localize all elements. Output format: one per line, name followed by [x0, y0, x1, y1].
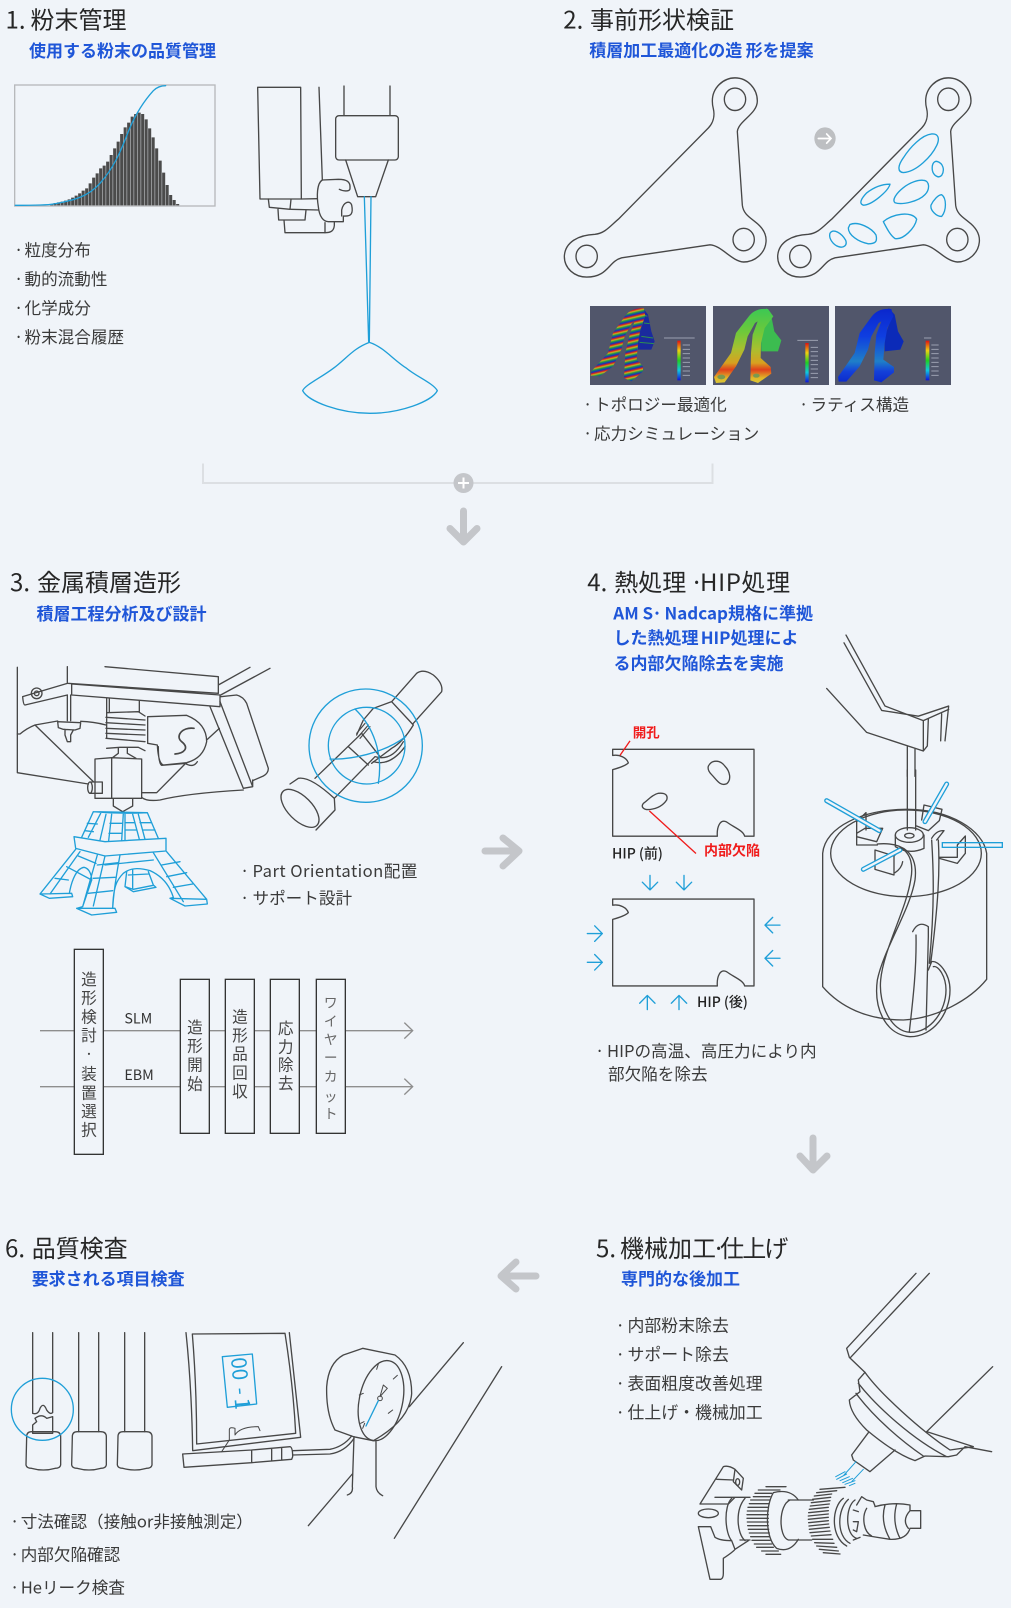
subheading: step 4: Nadcap規格に準拠	[664, 600, 813, 624]
bullet list: powder checks: ·	[14, 237, 23, 261]
bullet list: post processing: ·	[616, 1312, 625, 1336]
chart: particle size histogram with cumulative curve	[15, 85, 215, 206]
flow chart: build process: 選	[81, 1099, 97, 1122]
flow chart: build process: ヤ	[324, 1029, 337, 1049]
image: simulation heat maps	[590, 306, 951, 385]
flow chart: build process: 収	[232, 1079, 248, 1102]
icon: furnace with part and fixtures	[823, 770, 1002, 1037]
subheading: step 4: HIP処理によ	[701, 624, 799, 649]
bullet list: inspections: 寸法確認（接触or非接触測定）	[21, 1508, 253, 1532]
flow chart: build process: 品	[232, 1042, 248, 1065]
flow chart: build process: 造	[187, 1015, 203, 1038]
subheading: step 4: AM S	[613, 600, 653, 624]
bullet list: inspections: ·	[10, 1508, 19, 1532]
flow chart: build process: 討	[81, 1023, 97, 1046]
subheading: step 2: 形を提案	[746, 36, 814, 62]
heading: step 1: 1.	[6, 0, 26, 36]
flow chart: build process: 択	[81, 1118, 97, 1141]
bullet list: build preparation: サポート設計	[252, 885, 352, 909]
bullet: HIP effect: HIPの高温、高圧力により内	[607, 1038, 817, 1062]
bullet list: post processing: サポート除去	[628, 1340, 729, 1366]
flow chart: build process: 始	[187, 1071, 203, 1094]
heading: step 6: 品質検査	[32, 1229, 128, 1264]
bullet: HIP effect: ·	[595, 1038, 604, 1062]
icon: laptop with readout and pressure gauge: 00 - 1	[225, 1356, 259, 1411]
icon: powder feed nozzle machine	[258, 86, 437, 413]
subheading: step 4: した熱処理	[614, 624, 698, 649]
diagram: part after HIP with pressure arrows	[587, 875, 780, 1010]
bullet list: powder checks: ·	[14, 266, 23, 290]
flow chart: build process: カ	[324, 1065, 337, 1085]
bullet list: inspections: ·	[10, 1542, 19, 1566]
icon: laptop with readout and pressure gauge	[183, 1333, 502, 1538]
panel: 2 shape verification	[563, 0, 979, 444]
bullet list: optimisation methods: ラティス構造	[810, 392, 909, 416]
icon: furnace gripper arm	[827, 635, 949, 776]
flow chart: build process: 検	[81, 1004, 97, 1027]
heading: step 5: 5.	[596, 1229, 616, 1264]
bullet list: powder checks	[14, 237, 124, 348]
flow chart: build process: 回	[232, 1060, 248, 1083]
flow chart: build process: 形	[81, 986, 97, 1009]
flow chart: build process: ッ	[324, 1085, 337, 1105]
subheading: step 5: 専門的な後加工	[621, 1265, 740, 1290]
subheading: step 4: る内部欠陥除去を実施	[614, 650, 784, 674]
panel: 5 machining and finishing	[596, 1229, 993, 1579]
flow chart: build process: ·	[85, 1042, 93, 1065]
bullet list: post processing: ·	[616, 1398, 625, 1424]
heading: step 5: 仕上げ	[720, 1229, 788, 1264]
icon: 3D printer head	[17, 667, 270, 812]
flow chart: build process	[40, 949, 413, 1154]
subheading: step 4: ·	[652, 600, 662, 624]
bullet list: optimisation methods: ·	[799, 392, 808, 416]
flow chart: build process: 形	[232, 1023, 248, 1046]
flow chart: build process: 造	[232, 1004, 248, 1027]
heading: step 5: 機械加工	[620, 1229, 716, 1264]
arrow: down to step 3	[450, 511, 477, 542]
panel: 4 heat treatment and HIP	[587, 563, 1002, 1085]
heading: step 4: 4.	[587, 563, 607, 598]
bullet list: post processing: ·	[616, 1340, 625, 1366]
subheading: step 2: 積層加工最適化の造	[589, 36, 742, 62]
label: HIP after: HIP (後)	[697, 992, 748, 1012]
bullet list: inspections: Heリーク検査	[21, 1574, 125, 1598]
arrow: left to step 6	[501, 1262, 536, 1289]
flow chart: build process: 力	[278, 1034, 293, 1057]
bullet list: inspections: 内部欠陥確認	[21, 1542, 121, 1566]
heading: step 3: 3.	[10, 563, 30, 598]
icon: broken test pillars in bases	[11, 1333, 152, 1470]
flow chart: build process: 開	[187, 1053, 203, 1076]
flow chart: build process: 造	[81, 967, 97, 990]
flow chart: build process: SLM	[124, 1007, 152, 1028]
flow chart: build process: ト	[324, 1103, 337, 1123]
panel: 1 powder management	[6, 0, 437, 413]
connector: bracket joining steps 1 and 2	[203, 464, 712, 493]
flow chart: build process: EBM	[124, 1064, 154, 1085]
bullet list: post processing: 仕上げ・機械加工	[628, 1398, 763, 1424]
bullet list: inspections: ·	[10, 1574, 19, 1598]
bullet list: inspections	[10, 1508, 253, 1598]
flow chart: build process: 去	[278, 1071, 293, 1094]
bullet list: powder checks: 化学成分	[24, 295, 91, 319]
heading: step 4: 熱処理	[614, 563, 686, 598]
diagram: part before HIP with defects	[613, 741, 754, 853]
bullet list: post processing: 内部粉末除去	[628, 1312, 729, 1336]
bullet list: powder checks: ·	[14, 295, 23, 319]
bullet list: powder checks: 粉末混合履歴	[24, 324, 124, 348]
flow chart: build process: 形	[187, 1034, 203, 1057]
heading: step 4: ·	[690, 563, 703, 598]
bullet list: build preparation: Part Orientation配置	[252, 858, 418, 882]
flow chart: build process: ー	[324, 1047, 337, 1067]
subheading: step 3: 積層工程分析及び設計	[36, 600, 206, 625]
bullet list: build preparation: ·	[240, 885, 249, 909]
diagram: bracket before and after topology optimisation	[564, 78, 979, 277]
flow chart: build process: ワ	[324, 991, 337, 1011]
flow chart: build process: 除	[278, 1053, 294, 1076]
label: internal defect: 内部欠陥	[704, 840, 760, 860]
bullet list: optimisation methods: ·	[583, 420, 592, 444]
heading: step 1: 粉末管理	[30, 0, 126, 36]
flow chart: build process: 応	[278, 1016, 294, 1039]
bullet list: post processing	[616, 1312, 763, 1424]
panel: 6 quality inspection	[5, 1229, 502, 1598]
icon: part orientation with target rings	[275, 671, 442, 834]
bullet list: powder checks: 動的流動性	[24, 266, 107, 290]
bullet list: optimisation methods: トポロジー最適化	[594, 392, 727, 416]
heading: step 5: ·	[712, 1229, 725, 1264]
flow chart: build process: 置	[81, 1080, 97, 1103]
bullet list: powder checks: 粒度分布	[24, 237, 91, 261]
label: HIP before: HIP (前)	[612, 844, 663, 864]
heading: step 4: HIP処理	[700, 563, 791, 598]
label: hole: 開孔	[633, 722, 660, 742]
bullet list: post processing: 表面粗度改善処理	[628, 1370, 763, 1394]
heading: step 2: 2.	[563, 0, 583, 36]
arrow: right to step 4	[485, 838, 519, 866]
heading: step 2: 事前形状検証	[590, 0, 734, 36]
flow chart: build process: 装	[81, 1062, 97, 1085]
bullet list: post processing: ·	[616, 1370, 625, 1394]
icon: Eiffel tower lattice print	[40, 812, 207, 915]
subheading: step 6: 要求される項目検査	[32, 1265, 185, 1290]
bullet list: optimisation methods	[583, 392, 909, 444]
icon: machining spindle	[847, 1273, 993, 1472]
bullet list: optimisation methods: ·	[583, 392, 592, 416]
bullet list: optimisation methods: 応力シミュレーション	[594, 420, 759, 444]
arrow: down to step 5	[800, 1138, 827, 1170]
flow chart: build process: イ	[324, 1010, 337, 1030]
heading: step 6: 6.	[5, 1229, 25, 1264]
bullet list: build preparation: ·	[240, 858, 250, 882]
heading: step 3: 金属積層造形	[37, 563, 181, 598]
panel: 3 metal additive manufacturing	[10, 563, 442, 1154]
bullet: HIP effect: 部欠陥を除去	[608, 1061, 708, 1085]
icon: machined workpiece with gears	[698, 1462, 921, 1579]
bullet list: powder checks: ·	[14, 324, 23, 348]
subheading: step 1: 使用する粉末の品質管理	[29, 37, 216, 62]
bullet list: build preparation	[240, 858, 418, 909]
